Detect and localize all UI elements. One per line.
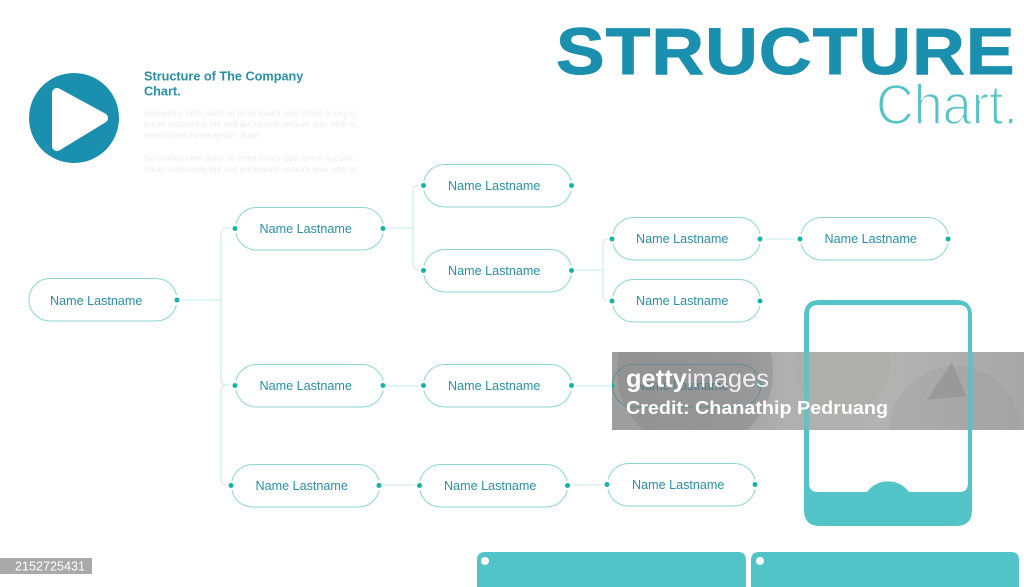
node: root [29, 278, 182, 321]
node: root: Name Lastname [50, 294, 142, 308]
node: level 1 middle: Name Lastname [260, 379, 352, 393]
subtitle: Chart.: Chart. [876, 73, 1018, 137]
node: level 2 middle: Name Lastname [448, 379, 540, 393]
node: level 3 top [607, 218, 765, 260]
node: level 1 top [230, 208, 388, 250]
text block: description: tetuer adipiscing elit sed qui blandit veniam quis nibh et, [144, 164, 359, 174]
image id tag: 2152725431 [15, 560, 85, 574]
image id tag [0, 558, 92, 574]
bottom panel right [751, 552, 1019, 587]
node: level 2 middle [418, 364, 576, 407]
heading: structure of the company chart: Structure of The Company [144, 70, 303, 84]
watermark logo: gettyimages [626, 365, 769, 393]
node: level 2 bottom: Name Lastname [444, 479, 536, 493]
text block: description: tetuer adipiscing elit sed qui blandit veniam quis nibh et, [144, 119, 359, 129]
heading: structure of the company chart: Chart. [144, 84, 181, 98]
node: level 2 second [418, 250, 576, 292]
text block: description: Nonummy nibh dolor sit amet lorem quis lorem accumc- [144, 153, 358, 163]
bottom panel left [477, 552, 746, 587]
node: level 1 bottom [226, 464, 384, 507]
device frame [804, 300, 972, 526]
node: level 3 bottom: Name Lastname [632, 478, 724, 492]
node: level 4 [795, 218, 953, 260]
node: level 1 middle [230, 364, 388, 407]
node: level 2 top [418, 164, 576, 207]
node under watermark: level 3 middle [610, 364, 762, 407]
icon: play button [29, 73, 119, 163]
text block: description: exercitation lorem ipsum dolor [144, 130, 259, 140]
node: level 1 bottom: Name Lastname [256, 479, 348, 493]
text block: description: Nonummy nibh dolor sit amet lorem quis lorem accumc- [144, 108, 358, 118]
node: level 2 top: Name Lastname [448, 179, 540, 193]
node under watermark: level 3 middle: Name Lastname [636, 379, 728, 393]
node: level 2 bottom [414, 464, 572, 507]
node: level 3 second: Name Lastname [636, 294, 728, 308]
node: level 4: Name Lastname [824, 232, 917, 246]
title: STRUCTURE: STRUCTURE [556, 14, 1016, 88]
connectors [177, 185, 800, 485]
node: level 3 bottom [602, 464, 760, 506]
node: level 2 second: Name Lastname [448, 264, 540, 278]
text block: description [144, 108, 359, 174]
watermark credit: Credit: Chanathip Pedruang [626, 397, 888, 418]
node: level 3 second [607, 280, 765, 322]
node: level 1 top: Name Lastname [260, 222, 352, 236]
node: level 3 top: Name Lastname [636, 232, 728, 246]
watermark band [612, 352, 1024, 430]
